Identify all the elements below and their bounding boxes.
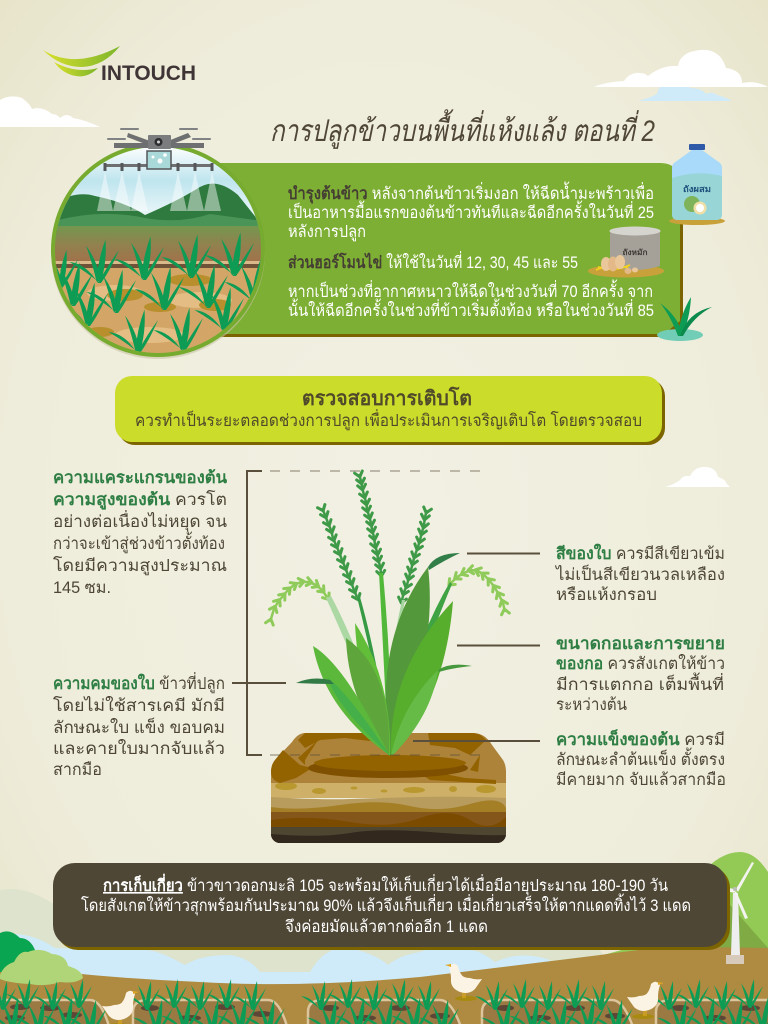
logo: Intouch [43,46,196,85]
panel background [200,163,683,337]
text block: tillering [556,635,725,714]
harvest text: โดยสังเกตให้ข้าวสุกพร้อมกันประมาณ 90% แล้วจึงเก็บเกี่ยว เมื่อเกี่ยวเสร็จให้ตากแดดทิ้งไว้ 3 แดด [81,893,691,916]
harvest text: การเก็บเกี่ยว ข้าวขาวดอกมะลิ 105 จะพร้อมให้เก็บเกี่ยวได้เมื่อมีอายุประมาณ 180-190 วัน [103,873,668,896]
icon: goose middle [445,964,482,1001]
spray cones [97,172,221,211]
illustration: fermenting tank with eggs: ถังหมัก [622,248,648,257]
text block: leaf colour: หรือแห้งกรอบ [556,586,657,604]
panel: soil care instructions [200,163,683,337]
text block: plant height: ความสูงของต้น ควรโต [53,490,227,511]
cloud: top right blue [638,81,732,101]
illustration: coconut water mixing bottle [669,144,725,225]
text block: care schedule: หลังการปลูก [288,223,366,242]
text block: leaf sharpness: และคายใบมากจับแล้ว [53,739,225,758]
text block: tillering: ขนาดกอและการขยาย [556,635,725,653]
text block: leaf sharpness: โดยไม่ใช้สารเคมี มักมี [53,696,225,715]
illustration: rice plant with panicles [270,474,505,756]
illustration: coconut water mixing bottle: ถังผสม [683,184,711,194]
panel: harvest note [53,863,730,950]
circle border [51,145,265,359]
ground [0,947,768,1024]
text block: care schedule: นั้นให้ฉีดอีกครั้งในช่วงที่ข้าวเริ่มตั้งท้อง หรือในช่วงวันที่ 85 [288,298,654,320]
text block: plant height [53,469,228,597]
bushes [0,931,35,972]
text block: tillering: มีการแตกกอ เต็มพื้นที่ [556,672,724,694]
text block: care schedule: เป็นอาหารมื้อแรกของต้นข้าวทันทีและฉีดอีกครั้งในวันที่ 25 [288,200,654,222]
illustration: soil block [271,733,506,845]
text block: plant height: กว่าจะเข้าสู่ช่วงข้าวตั้งท้อง [53,531,225,554]
harvest text [81,873,691,936]
text block: stem strength: ลักษณะลำต้นแข็ง ตั้งตรง [556,747,725,769]
text block: plant height: อย่างต่อเนื่องไม่หยุด จน [53,510,227,532]
panicles [270,474,505,622]
bracket and leader lines [232,471,540,755]
leaves [296,553,472,756]
rice plots row [0,979,768,1024]
text block: plant height: โดยมีความสูงประมาณ [53,556,227,576]
stems [326,573,452,755]
text block: plant height: ความแคระแกรนของต้น [53,469,228,487]
panel: growth check header [115,376,665,445]
text block: plant height: 145 ซม. [53,579,111,597]
text block: leaf colour: ไม่เป็นสีเขียวนวลเหลือง [554,564,725,584]
text block: leaf sharpness: ความคมของใบ ข้าวที่ปลูก [53,672,225,694]
text block: stem strength: มีคายมาก จับแล้วสากมือ [556,771,726,789]
text block: leaf colour: สีของใบ ควรมีสีเขียวเข้ม [556,543,725,563]
illustration: drone spraying rice field [51,128,265,359]
green hill [555,852,768,968]
text block: tillering: ของกอ ควรสังเกตให้ข้าว [556,654,725,673]
icon: wind turbine [702,862,754,964]
text block: stem strength [556,728,726,789]
text block: stem strength: ความแข็งของต้น ควรมี [556,728,725,749]
pale hill [0,889,620,985]
icon: goose right [627,982,664,1019]
text block: care schedule: หากเป็นช่วงที่อากาศหนาวให้ฉีดในช่วงวันที่ 70 อีกครั้ง จาก [288,279,653,301]
icon: goose left [102,991,139,1024]
logo: Intouch: INTOUCH [101,62,196,85]
text block: care schedule: ส่วนฮอร์โมนไข่ ให้ใช้ในวันที่ 12, 30, 45 และ 55 [288,251,578,272]
field scene [55,148,261,353]
blue clouds [0,934,560,985]
cloud: top right white [594,50,768,87]
title: การปลูกข้าวบนพื้นที่แห้งแล้ง ตอนที่ 2 [270,109,655,149]
text block: leaf sharpness: สากมือ [53,761,102,779]
cloud: middle right [665,467,730,487]
text block: leaf colour [554,543,725,604]
drone body [104,128,214,171]
subheading: ควรทำเป็นระยะตลอดช่วงการปลูก เพื่อประเมินการเจริญเติบโต โดยตรวจสอบ [135,409,642,431]
landscape: bottom background [0,852,768,1024]
text block: leaf sharpness: ลักษณะใบ แข็ง ขอบคม [53,717,225,737]
cloud: top left [0,96,100,127]
text block: care schedule: บำรุงต้นข้าว หลังจากต้นข้าวเริ่มงอก ให้ฉีดน้ำมะพร้าวเพื่อ [288,181,654,204]
heading: ตรวจสอบการเติบโต [302,386,472,410]
illustration: fermenting tank with eggs [588,226,664,278]
illustration: small rice plant [657,297,712,341]
text block: leaf sharpness [53,672,225,779]
text block: tillering: ระหว่างต้น [556,696,627,714]
text block: care schedule [288,181,654,320]
harvest text: จึงค่อยมัดแล้วตากต่ออีก 1 แดด [285,918,488,936]
